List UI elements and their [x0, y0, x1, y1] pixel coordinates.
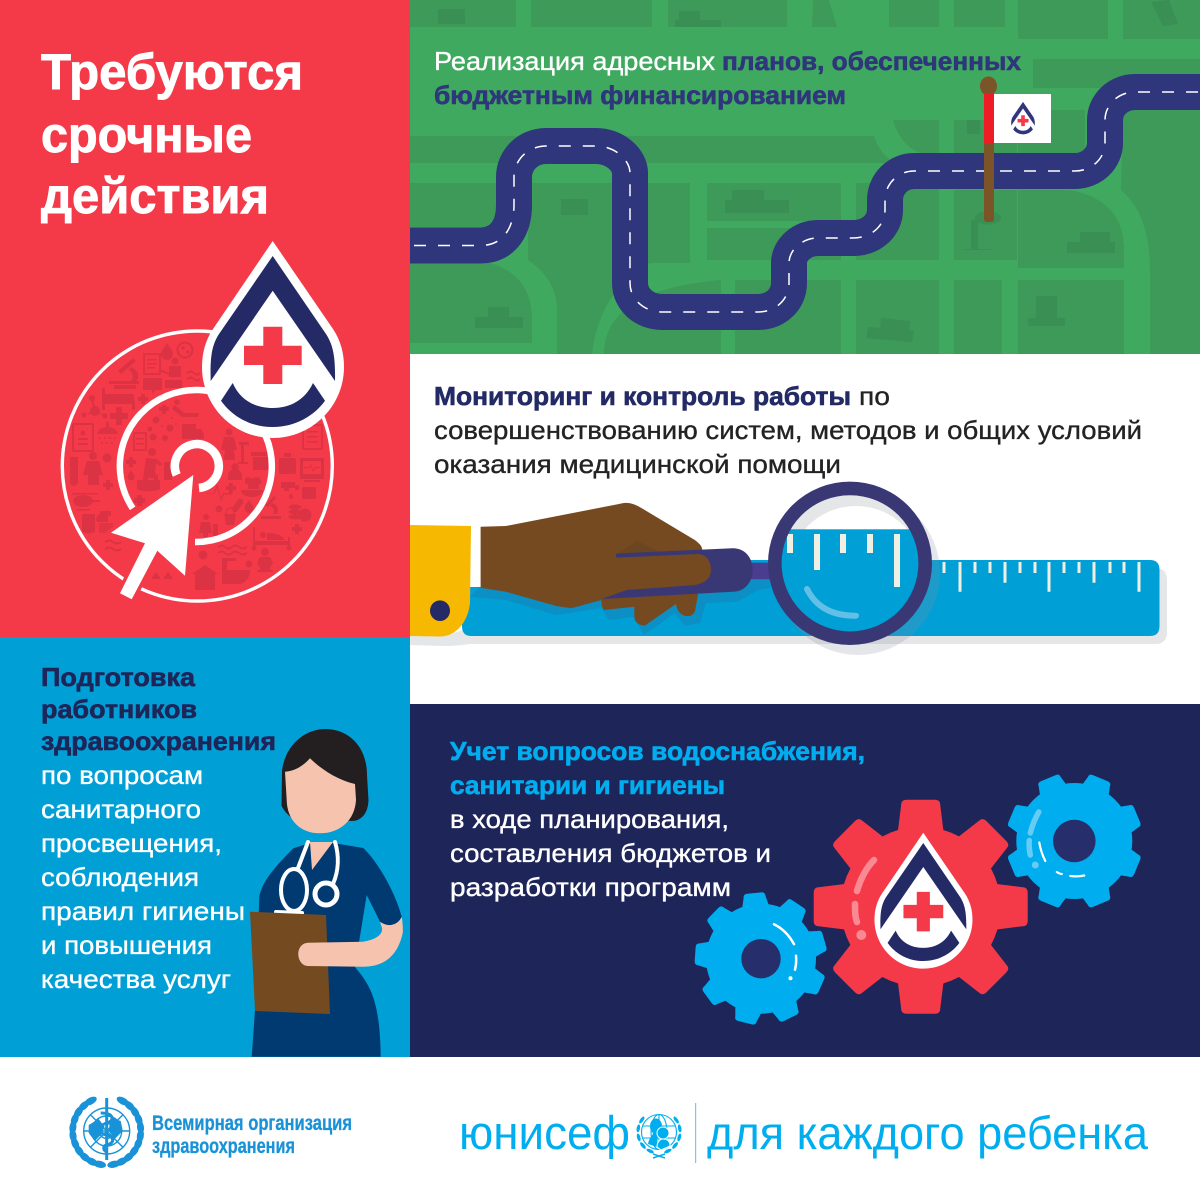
icon: cursor arrow: [111, 475, 193, 599]
text: monitoring: оказания медицинской помощи: [434, 449, 841, 479]
title: [41, 44, 303, 224]
title: Требуются: [41, 44, 303, 100]
text: WHO name: [152, 1111, 352, 1158]
text: training details: качества услуг: [41, 964, 231, 994]
title: действия: [41, 168, 269, 224]
icon: left blue gear: [694, 892, 828, 1026]
ruler: [410, 560, 1167, 646]
divider: [695, 1103, 696, 1163]
text: WHO name: здравоохранения: [152, 1134, 295, 1158]
icon: blood drop with cross logo: [202, 241, 344, 438]
heading: targeted plans text: [434, 46, 1022, 110]
icon: health worker: [250, 729, 403, 1057]
text: training details: по вопросам: [41, 760, 203, 790]
city blocks: [410, 0, 1200, 354]
logo: WHO: [69, 1095, 352, 1169]
heading: training: работников: [41, 694, 197, 724]
text: training details: правил гигиены: [41, 896, 245, 926]
icon: magnifying glass: [770, 485, 940, 655]
text: WASH details: в ходе планирования,: [450, 804, 729, 834]
heading: training: [41, 662, 276, 756]
icon: target rings: [62, 331, 332, 601]
icon: health icons pattern in target: [70, 342, 324, 590]
icon: sleeve: [410, 525, 471, 636]
heading: WASH: санитарии и гигиены: [450, 770, 725, 800]
text: training details: соблюдения: [41, 862, 199, 892]
icon: UNICEF emblem: [636, 1114, 682, 1158]
panel: targeted plans (green): [410, 0, 1200, 354]
icon: right blue gear: [1006, 772, 1143, 910]
icon: red gear with drop: [814, 800, 1028, 1014]
road: [410, 92, 1200, 312]
text: UNICEF wordmark: юнисеф: [459, 1106, 630, 1159]
heading: training: Подготовка: [41, 662, 196, 692]
panel: health worker training (blue): [0, 637, 410, 1057]
icon: WHO emblem: [69, 1095, 145, 1169]
heading: targeted plans text: бюджетным финансированием: [434, 80, 846, 110]
title: срочные: [41, 107, 252, 163]
heading: targeted plans text: Реализация адресных: [434, 46, 715, 76]
panel: monitoring (white): [410, 386, 1167, 655]
icon: stethoscope: [276, 842, 338, 913]
heading: targeted plans text: планов, обеспеченных: [722, 46, 1022, 76]
heading: training: здравоохранения: [41, 726, 276, 756]
text: training details: [41, 760, 245, 994]
heading: WASH: Учет вопросов водоснабжения,: [450, 736, 865, 766]
panel: WASH in planning (navy): [410, 704, 1200, 1057]
icon: hand with magnifier handle: [470, 503, 774, 635]
logo: UNICEF: [459, 1103, 1148, 1163]
text: monitoring: совершенствованию систем, методов и общих условий: [434, 415, 1142, 445]
text: WASH details: [450, 804, 771, 902]
text: training details: просвещения,: [41, 828, 222, 858]
text: training details: санитарного: [41, 794, 201, 824]
text: UNICEF slogan: для каждого ребенка: [707, 1107, 1148, 1159]
text: WASH details: разработки программ: [450, 872, 731, 902]
text: monitoring: по: [859, 381, 890, 411]
panel: urgent action (red): [0, 0, 410, 637]
text: WASH details: составления бюджетов и: [450, 838, 771, 868]
text: training details: и повышения: [41, 930, 212, 960]
icon: flag with drop logo: [975, 76, 1051, 224]
text: monitoring: [434, 381, 1142, 479]
text: WHO name: Всемирная организация: [152, 1111, 352, 1135]
houses: [438, 0, 1178, 342]
heading: WASH: [450, 736, 865, 800]
icon: clipboard: [250, 912, 330, 1014]
text: monitoring: Мониторинг и контроль работы: [434, 381, 851, 411]
